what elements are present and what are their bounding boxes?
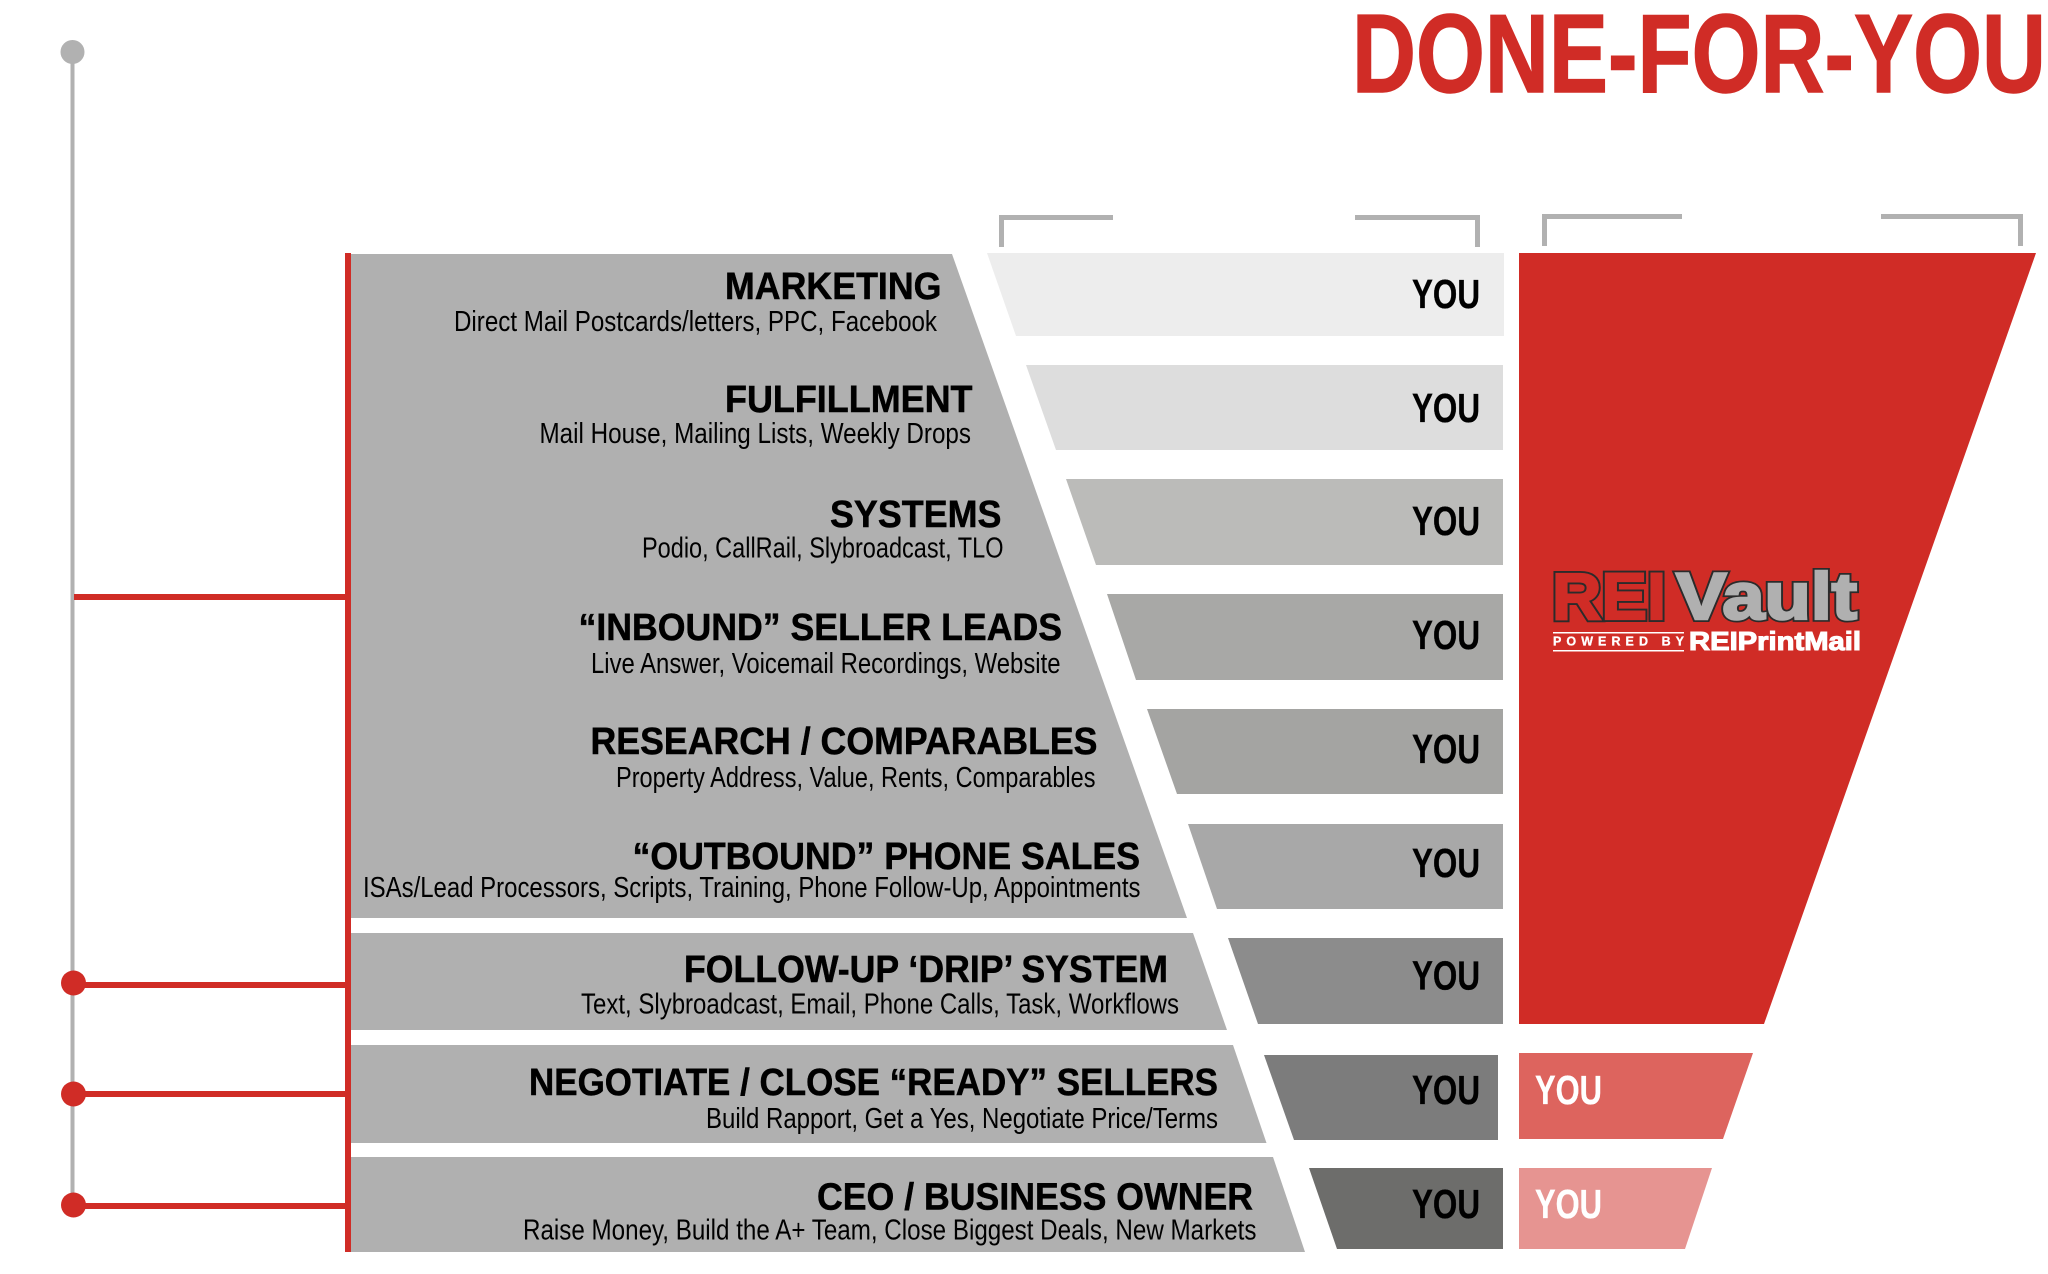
panel: CEO bbox=[351, 1157, 1305, 1252]
red YOU block: negotiate: YOU bbox=[1535, 1067, 1602, 1113]
row 5: YOU bbox=[1412, 726, 1480, 772]
text: fulfillment bbox=[540, 379, 972, 450]
icon: red dot follow-up bbox=[61, 970, 86, 996]
text: systems: Podio, CallRail, Slybroadcast, TLO bbox=[642, 532, 1004, 564]
logo wordmark REIPrintMail: REIPrintMail bbox=[1689, 626, 1861, 656]
row 9 bbox=[1309, 1168, 1503, 1249]
row 5 bbox=[1147, 709, 1503, 794]
text: fulfillment: FULFILLMENT bbox=[725, 379, 972, 421]
text: fulfillment: Mail House, Mailing Lists, Weekly Drops bbox=[540, 418, 971, 450]
text: inbound seller leads: “INBOUND” SELLER LEADS bbox=[578, 607, 1062, 649]
red YOU block: CEO bbox=[1519, 1168, 1712, 1249]
red vertical bracket line bbox=[345, 253, 351, 1252]
logo tagline: POWERED BY bbox=[1553, 634, 1685, 648]
text: outbound phone sales: “OUTBOUND” PHONE SALES bbox=[632, 836, 1140, 878]
logo wordmark Vault: Vault bbox=[1676, 559, 1857, 633]
connector: top group bbox=[74, 594, 346, 600]
text: follow-up drip system: FOLLOW-UP ‘DRIP’ SYSTEM bbox=[684, 949, 1168, 991]
text: marketing: MARKETING bbox=[725, 266, 942, 308]
row 8 bbox=[1264, 1055, 1498, 1140]
bracket: right column right bbox=[1881, 216, 2020, 246]
text: CEO business owner: CEO / BUSINESS OWNER bbox=[817, 1176, 1253, 1218]
text: marketing bbox=[454, 266, 942, 338]
timeline: vertical axis with connectors bbox=[60, 40, 346, 1218]
icon: gray start dot bbox=[60, 40, 84, 64]
text: outbound phone sales bbox=[363, 836, 1140, 904]
text: outbound phone sales: ISAs/Lead Processors, Scripts, Training, Phone Follow-Up, Appointments bbox=[363, 872, 1140, 904]
text: CEO business owner: Raise Money, Build the A+ Team, Close Biggest Deals, New Markets bbox=[523, 1214, 1256, 1246]
right funnel: red done-for-you panel bbox=[1519, 253, 2036, 1024]
text: negotiate close: NEGOTIATE / CLOSE “READY” SELLERS bbox=[529, 1062, 1218, 1104]
row 1 bbox=[987, 253, 1504, 336]
text: research: RESEARCH / COMPARABLES bbox=[590, 721, 1098, 763]
row 6 bbox=[1188, 824, 1503, 909]
text: negotiate close bbox=[529, 1062, 1218, 1135]
row 3 bbox=[1066, 479, 1503, 565]
logo wordmark REI: REI bbox=[1552, 559, 1666, 633]
row 4: YOU bbox=[1412, 612, 1480, 658]
panel: negotiate bbox=[351, 1045, 1266, 1143]
icon: red dot negotiate bbox=[61, 1082, 86, 1106]
text: negotiate close: Build Rapport, Get a Yes, Negotiate Price/Terms bbox=[706, 1103, 1218, 1135]
logo wordmark Vault: Vault bbox=[1676, 559, 1857, 633]
row 1: YOU bbox=[1412, 271, 1480, 317]
middle funnel: YOU rows bbox=[987, 253, 1504, 1249]
red YOU block: CEO: YOU bbox=[1535, 1181, 1602, 1227]
row 4 bbox=[1107, 594, 1503, 680]
logo wordmark REI: REI bbox=[1552, 559, 1666, 633]
red YOU block: negotiate bbox=[1519, 1053, 1753, 1139]
connector: follow-up drip bbox=[85, 982, 346, 988]
text: research: Property Address, Value, Rents, Comparables bbox=[616, 762, 1096, 794]
row 6: YOU bbox=[1412, 840, 1480, 886]
text: inbound seller leads: Live Answer, Voicemail Recordings, Website bbox=[591, 648, 1060, 680]
row 7 bbox=[1228, 938, 1503, 1024]
left funnel: role panels bbox=[345, 253, 1305, 1252]
bracket: middle column left bbox=[1002, 218, 1113, 247]
text: systems bbox=[642, 494, 1004, 564]
row 2: YOU bbox=[1412, 385, 1480, 431]
logo: REIVault powered by REIPrintMail bbox=[1552, 559, 1861, 656]
text: research bbox=[590, 721, 1098, 794]
text: inbound seller leads bbox=[578, 607, 1062, 680]
row 8: YOU bbox=[1412, 1067, 1480, 1113]
connector: negotiate bbox=[85, 1091, 346, 1097]
text: systems: SYSTEMS bbox=[830, 494, 1002, 536]
row 2 bbox=[1026, 365, 1503, 450]
panel: team functions bbox=[351, 254, 1187, 918]
panel: follow-up drip bbox=[351, 933, 1227, 1030]
row 9: YOU bbox=[1412, 1181, 1480, 1227]
bracket: middle column right bbox=[1355, 218, 1478, 247]
row 3: YOU bbox=[1412, 498, 1480, 544]
text: marketing: Direct Mail Postcards/letters, PPC, Facebook bbox=[454, 306, 938, 338]
connector: CEO bbox=[85, 1203, 346, 1209]
text: follow-up drip system: Text, Slybroadcast, Email, Phone Calls, Task, Workflows bbox=[581, 988, 1179, 1020]
text: CEO business owner bbox=[523, 1176, 1256, 1246]
row 7: YOU bbox=[1412, 952, 1480, 998]
bracket: right column left bbox=[1544, 216, 1682, 246]
text: follow-up drip system bbox=[581, 949, 1179, 1020]
icon: red dot CEO bbox=[61, 1192, 86, 1218]
